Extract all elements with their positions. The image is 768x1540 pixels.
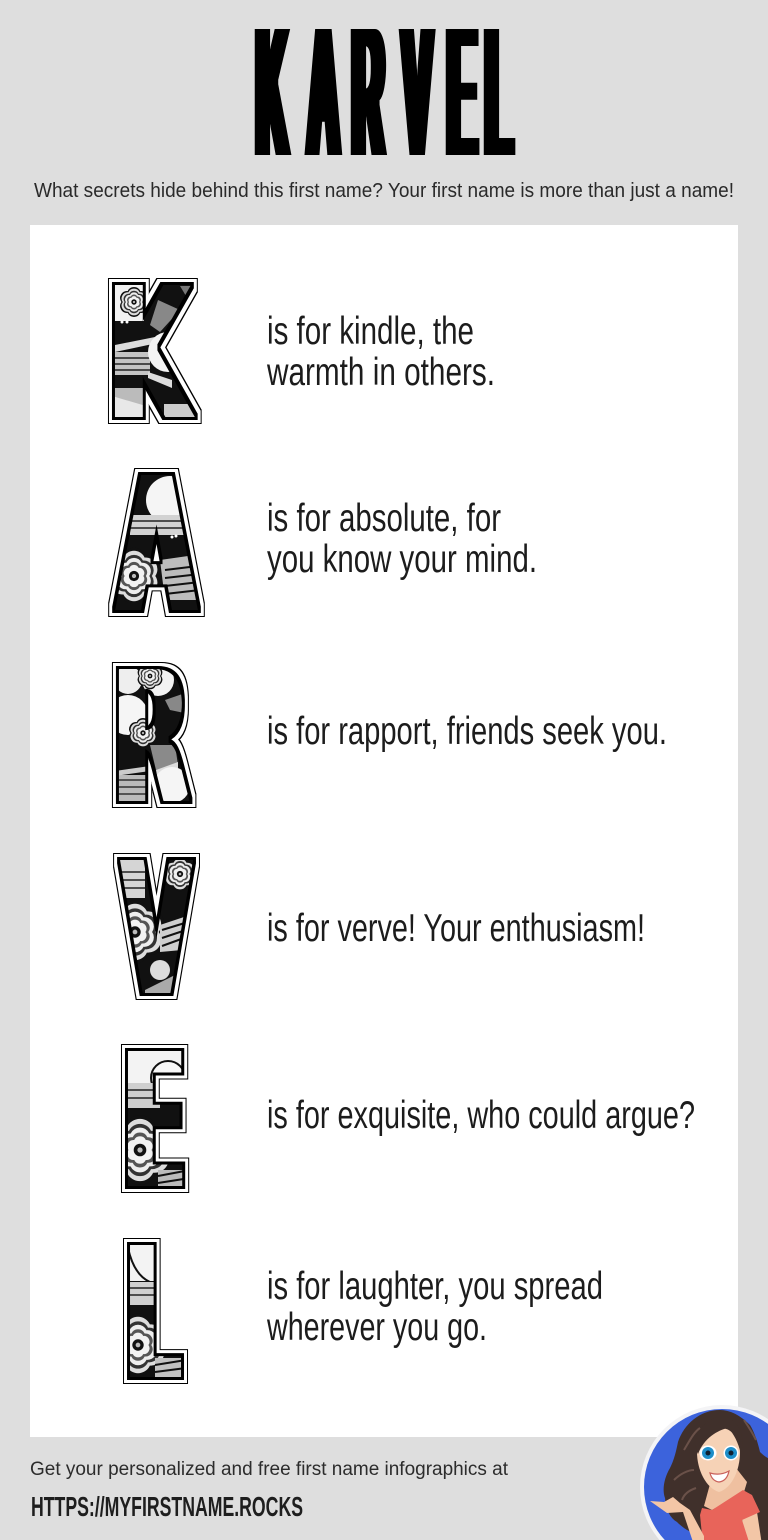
eyes <box>700 1446 716 1460</box>
panel background <box>30 225 738 1437</box>
footer call to action: Get your personalized and free first name infographics at <box>30 1459 509 1480</box>
art: R <box>105 655 210 815</box>
letter A: A <box>118 435 196 659</box>
letter V: V <box>123 820 191 1042</box>
left arm and hand <box>650 1497 704 1540</box>
text: K meaning: warmth in others. <box>266 351 495 394</box>
letter E: E <box>124 1009 185 1235</box>
letter L: L <box>126 1205 179 1425</box>
mouth <box>710 1471 729 1482</box>
face <box>697 1428 740 1492</box>
text: K meaning: is for kindle, the <box>267 310 474 353</box>
footer url: HTTPS://MYFIRSTNAME.ROCKS <box>31 1491 303 1522</box>
right arm <box>742 1512 762 1540</box>
subtitle: What secrets hide behind this first name? Your first name is more than just a name! <box>34 180 734 202</box>
art: V <box>105 845 210 1005</box>
hair <box>664 1410 768 1540</box>
illustrated letters K A R V E L with outline rings <box>109 246 196 1425</box>
panel: name letters <box>30 225 738 1437</box>
text: A meaning: is for absolute, for <box>267 497 501 540</box>
letter K: K <box>109 246 195 466</box>
shirt <box>700 1490 760 1540</box>
hair parting <box>697 1428 740 1454</box>
art: K <box>100 270 210 430</box>
text: A meaning: you know your mind. <box>267 538 537 581</box>
art: L <box>109 1235 195 1390</box>
avatar: woman presenting <box>640 1405 768 1540</box>
neck <box>704 1468 747 1510</box>
art: A <box>100 460 210 620</box>
text: V meaning: is for verve! Your enthusiasm! <box>267 907 645 950</box>
letter R: R <box>114 629 189 849</box>
text: L meaning: wherever you go. <box>266 1306 487 1349</box>
mandala artwork behind the letters <box>100 270 210 1390</box>
text: L meaning: is for laughter, you spread <box>267 1265 603 1308</box>
art: E <box>108 1040 195 1200</box>
